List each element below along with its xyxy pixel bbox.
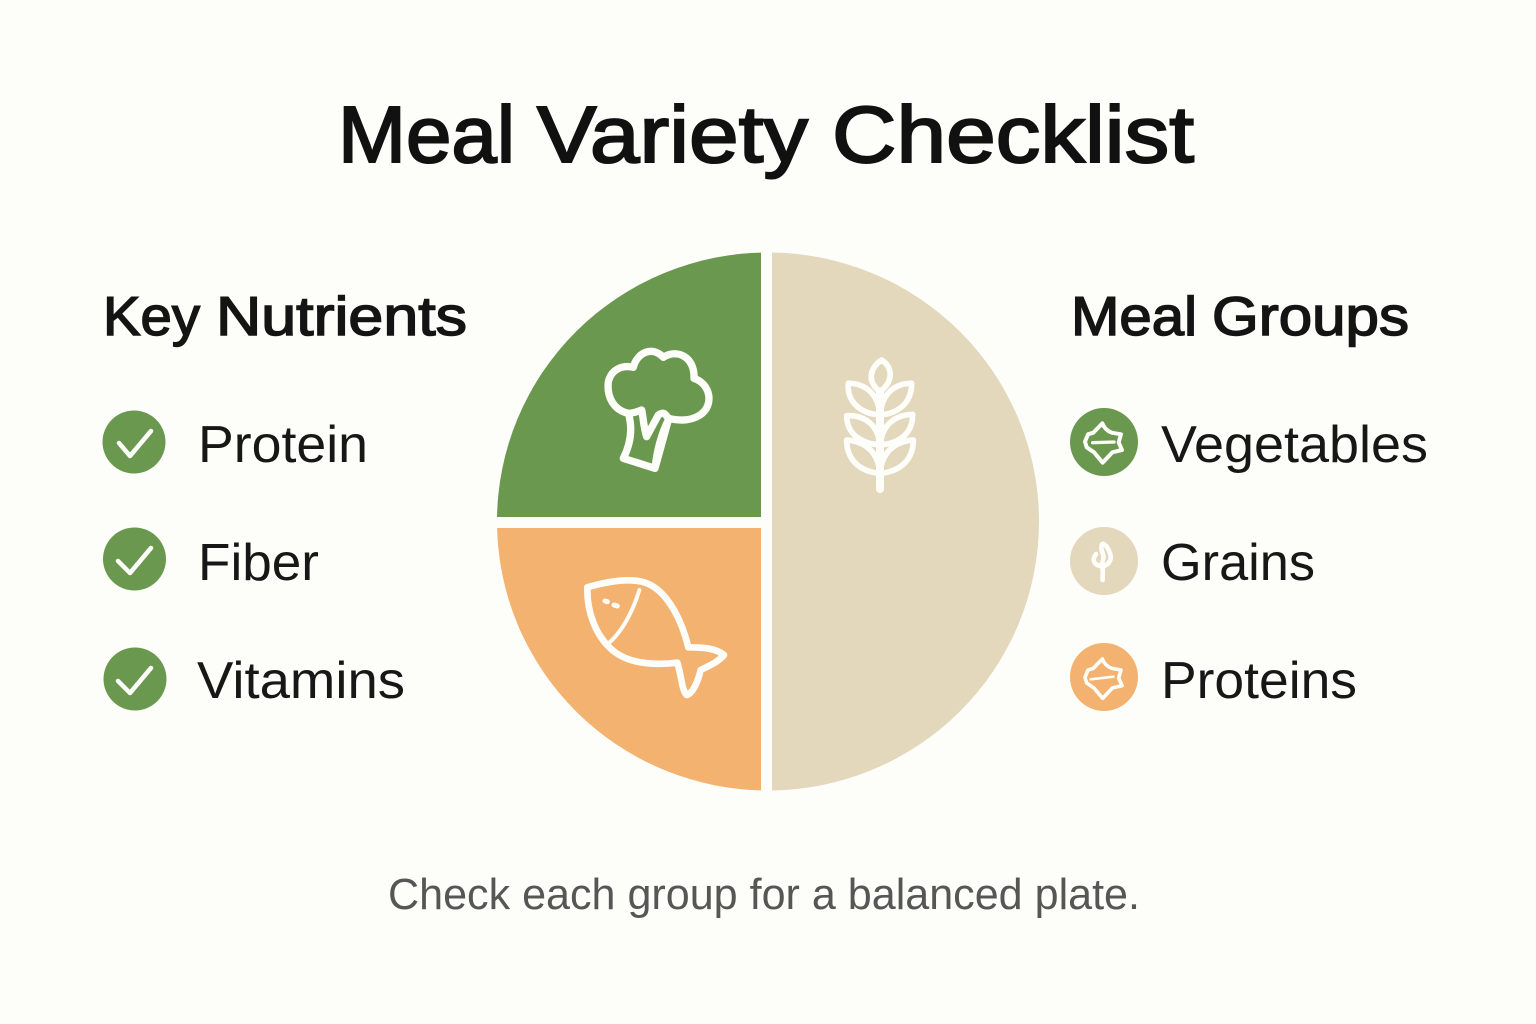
title: Checklist bbox=[832, 90, 1194, 179]
check item: vitamins: Vitamins bbox=[197, 652, 405, 710]
title: Variety bbox=[537, 90, 808, 179]
footer caption: Check each group for a balanced plate. bbox=[388, 870, 1140, 919]
heading: meal groups: Meal bbox=[1071, 285, 1197, 347]
segment: proteins bbox=[497, 528, 761, 790]
icon: broccoli bbox=[608, 351, 709, 468]
heading: key nutrients: Nutrients bbox=[216, 285, 467, 347]
check item: protein: Protein bbox=[198, 416, 368, 474]
icon: fish bbox=[587, 580, 724, 695]
check item: vitamins bbox=[104, 648, 405, 710]
panel: key nutrients bbox=[102, 285, 467, 710]
title: Meal bbox=[338, 90, 515, 179]
check item: fiber: Fiber bbox=[198, 534, 319, 592]
legend item: proteins bbox=[1070, 643, 1357, 711]
legend item: grains bbox=[1070, 527, 1315, 595]
segment: vegetables bbox=[497, 252, 761, 517]
legend item: grains: Grains bbox=[1161, 534, 1315, 592]
panel: meal groups bbox=[1070, 285, 1428, 711]
heading: meal groups: Groups bbox=[1212, 285, 1409, 347]
legend item: vegetables bbox=[1070, 408, 1428, 476]
legend item: vegetables: Vegetables bbox=[1161, 416, 1428, 474]
icon: wheat bbox=[847, 360, 913, 489]
check item: protein bbox=[102, 410, 368, 474]
heading: key nutrients: Key bbox=[103, 285, 201, 347]
legend item: proteins: Proteins bbox=[1161, 652, 1357, 710]
segment: grains bbox=[772, 252, 1039, 790]
pie chart: plate bbox=[497, 252, 1039, 790]
check item: fiber bbox=[103, 528, 319, 592]
